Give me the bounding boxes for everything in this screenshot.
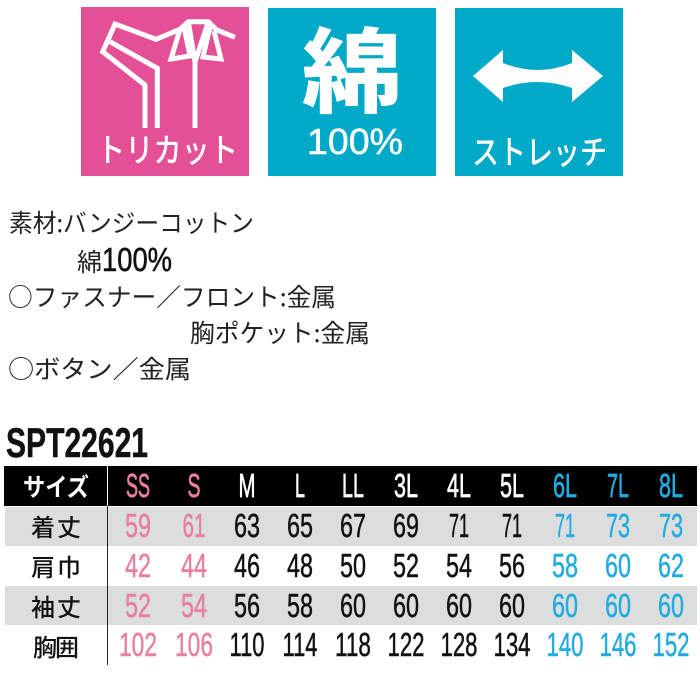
icon panel: stretch	[455, 8, 623, 176]
table row: shoulder width: 52	[393, 547, 419, 584]
table row: length: 71	[502, 507, 522, 544]
table row: shoulder width: 54	[446, 547, 472, 584]
table row: length: 63	[234, 507, 260, 544]
table header row: LL	[342, 467, 364, 504]
table row: shoulder width: 58	[552, 547, 578, 584]
table header row: 7L	[607, 467, 629, 504]
table row: length: 65	[287, 507, 313, 544]
table row: sleeve length: 58	[287, 587, 313, 624]
table header row: L	[295, 467, 305, 504]
product code heading: SPT22621	[6, 419, 148, 466]
table row: shoulder width: 62	[658, 547, 684, 584]
table row: sleeve length: 60	[340, 587, 366, 624]
table row: chest: 胸囲	[33, 628, 79, 663]
table row: sleeve length	[31, 587, 684, 624]
table header row: サイズ	[23, 468, 89, 504]
table row: length: 73	[659, 507, 683, 544]
icon panel: cotton 100%	[268, 0, 436, 176]
spec line: front zipper: ○ファスナー／フロント:金属	[8, 278, 336, 314]
table row: length: 61	[182, 507, 206, 544]
table row: shoulder width: 肩巾	[31, 548, 81, 583]
table row: length: 69	[393, 507, 419, 544]
table row: length: 71	[555, 507, 575, 544]
spec line: button: ○ボタン／金属	[8, 350, 191, 386]
table row: sleeve length: 54	[181, 587, 207, 624]
table row: chest: 140	[546, 626, 584, 663]
table row: shoulder width: 50	[340, 547, 366, 584]
table header row: M	[238, 467, 256, 504]
table row: sleeve length: 60	[552, 587, 578, 624]
table row: length: 59	[125, 507, 151, 544]
spec line: chest pocket zipper: 胸ポケット:金属	[190, 314, 370, 350]
table row: chest	[33, 626, 690, 663]
table row: chest: 134	[494, 626, 530, 663]
table header row: 3L	[394, 467, 418, 504]
table header row	[23, 467, 683, 504]
table row: length: 71	[449, 507, 469, 544]
table header row: 4L	[447, 467, 471, 504]
table row: sleeve length: 60	[658, 587, 684, 624]
icon glyph: cotton: 綿	[302, 0, 402, 132]
table row: chest: 110	[230, 626, 264, 663]
table row: length: 67	[340, 507, 366, 544]
icon panel: tri-cut	[81, 7, 249, 176]
table row: sleeve length: 袖丈	[31, 588, 81, 623]
table header row: S	[188, 467, 200, 504]
material specification text	[8, 204, 370, 386]
table row: sleeve length: 52	[125, 587, 151, 624]
table row: sleeve length: 56	[234, 587, 260, 624]
spec line: cotton 100%: 綿100%	[77, 241, 172, 279]
table row: length: 着丈	[31, 508, 81, 543]
table row: shoulder width: 44	[181, 547, 207, 584]
icon: jacket outline	[103, 22, 235, 128]
table row: sleeve length: 60	[393, 587, 419, 624]
icon label: tri-cut: トリカット	[97, 124, 238, 172]
table row: sleeve length: 60	[446, 587, 472, 624]
table row: chest: 118	[335, 626, 371, 663]
table row: shoulder width: 42	[125, 547, 151, 584]
spec line: material: 素材:バンジーコットン	[9, 204, 254, 240]
size table	[4, 466, 697, 665]
table row: shoulder width: 60	[605, 547, 631, 584]
icon: double-headed stretch arrow	[473, 50, 603, 102]
table row: chest: 128	[440, 626, 478, 663]
table header row: 8L	[659, 467, 683, 504]
table header row: SS	[126, 467, 150, 504]
icon label: 100%: 100%	[307, 121, 403, 162]
table row: chest: 114	[282, 626, 318, 663]
table row: shoulder width: 48	[287, 547, 313, 584]
table row: chest: 146	[600, 626, 636, 663]
icon label: stretch: ストレッチ	[472, 126, 607, 174]
table header row: 5L	[500, 467, 524, 504]
table header row: 6L	[553, 467, 577, 504]
table row: shoulder width: 46	[234, 547, 260, 584]
table row: length: 73	[606, 507, 630, 544]
table row: chest: 102	[119, 626, 157, 663]
table row: chest: 106	[175, 626, 213, 663]
table row: length	[31, 507, 683, 544]
table row: chest: 122	[388, 626, 424, 663]
table row: sleeve length: 60	[605, 587, 631, 624]
table row: sleeve length: 60	[499, 587, 525, 624]
table row: shoulder width: 56	[499, 547, 525, 584]
table row: shoulder width	[31, 547, 684, 584]
